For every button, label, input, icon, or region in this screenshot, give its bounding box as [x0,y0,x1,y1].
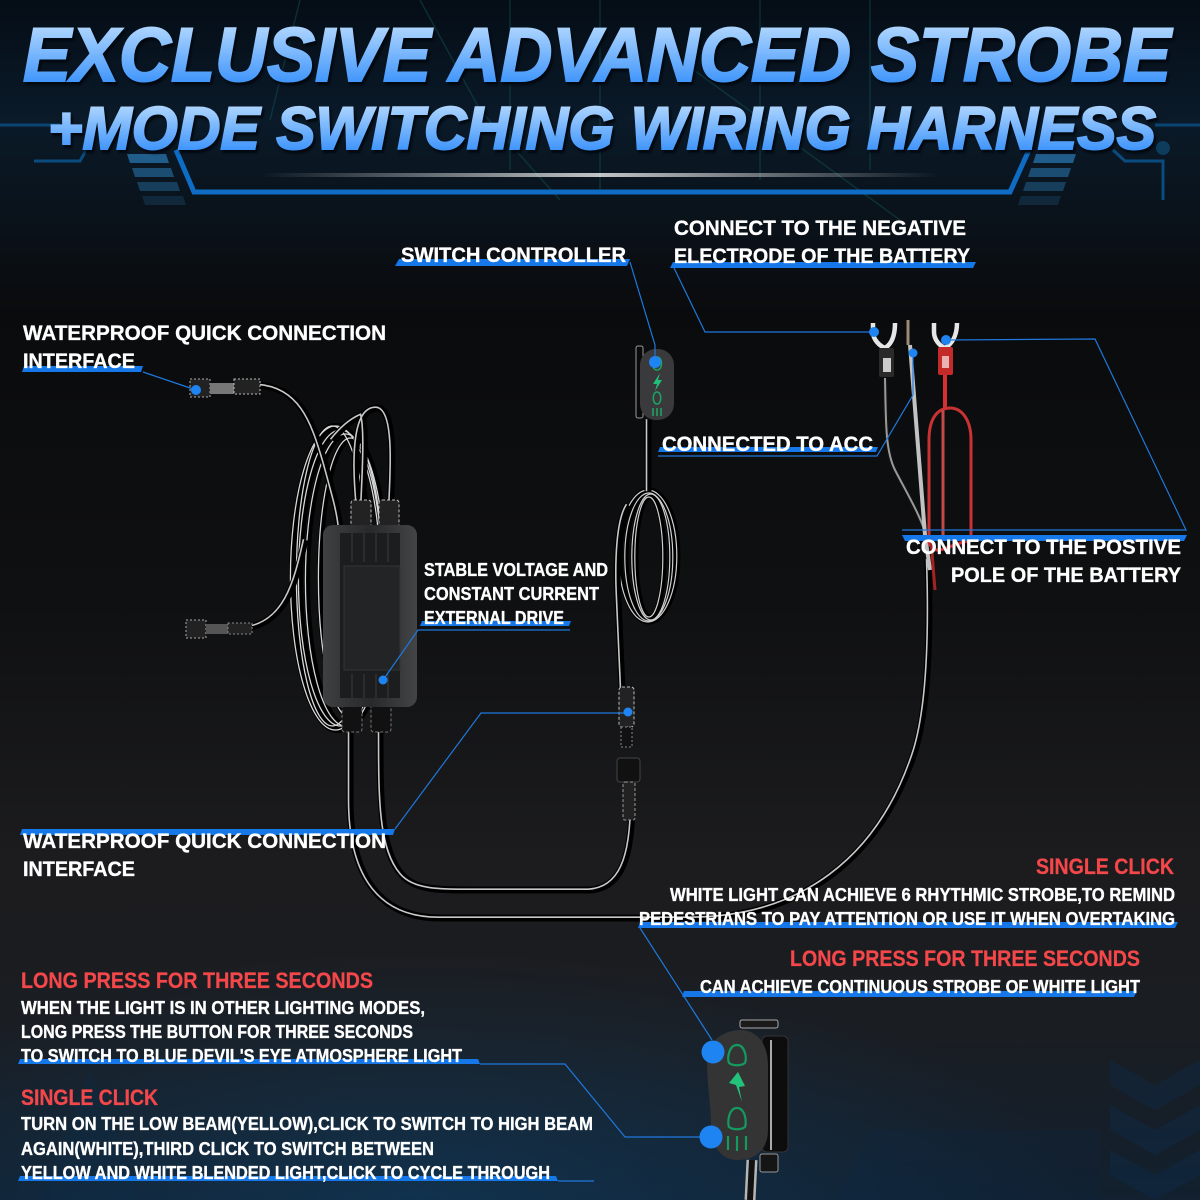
callout: switch controller: SWITCH CONTROLLER [401,244,626,267]
callout: stable voltage driver: CONSTANT CURRENT [424,584,599,604]
callout: positive pole: CONNECT TO THE POSTIVE [906,536,1181,559]
icon: upper left waterproof connector [190,379,260,397]
callout: single click left: TURN ON THE LOW BEAM(YELLOW),CLICK TO SWITCH TO HIGH BEAM [21,1114,593,1134]
icon: low beam and high beam green symbols [728,1045,746,1151]
callout: stable voltage driver: EXTERNAL DRIVE [424,608,564,628]
battery wires [885,320,972,590]
callout: waterproof interface lower: WATERPROOF QUICK CONNECTION [23,830,386,853]
callout: single click left: AGAIN(WHITE),THIRD CLICK TO SWITCH BETWEEN [21,1139,434,1159]
lower switch controller [707,1020,788,1200]
callout: waterproof interface upper: INTERFACE [23,350,135,373]
wiring harness product [186,320,972,918]
icon: strain reliefs on driver box [342,500,399,732]
callout: negative electrode: ELECTRODE OF THE BATTERY [674,245,970,268]
callout: single click right: SINGLE CLICK [1036,854,1174,879]
callout: single click left: YELLOW AND WHITE BLENDED LIGHT,CLICK TO CYCLE THROUGH [21,1163,550,1183]
title: +MODE SWITCHING WIRING HARNESS [48,95,1156,162]
callout: long press left: TO SWITCH TO BLUE DEVIL'S EYE ATMOSPHERE LIGHT [21,1046,462,1066]
title decorative frame [0,125,1200,205]
callout: connected to ACC [658,348,918,456]
callout: long press left: LONG PRESS FOR THREE SECONDS [21,968,373,993]
icon: positive spade terminal [934,323,957,375]
callout: waterproof interface upper: WATERPROOF QUICK CONNECTION [23,322,386,345]
callout: stable voltage driver: STABLE VOLTAGE AND [424,560,608,580]
callout: single click left: SINGLE CLICK [21,1085,158,1110]
callout: long press right: CAN ACHIEVE CONTINUOUS STROBE OF WHITE LIGHT [700,977,1140,997]
callout: long press right: LONG PRESS FOR THREE SECONDS [790,946,1140,971]
callout: single click right: WHITE LIGHT CAN ACHIEVE 6 RHYTHMIC STROBE,TO REMIND [670,885,1175,905]
inline waterproof connector [617,687,640,820]
callout: stable voltage driver [378,560,608,684]
callout: negative electrode: CONNECT TO THE NEGATIVE [674,217,966,240]
callout: long press left: WHEN THE LIGHT IS IN OTHER LIGHTING MODES, [21,998,425,1018]
callout: switch controller [395,244,661,368]
callout: long press right [682,946,1140,997]
callout: single click right [638,854,1178,929]
callout: negative electrode [670,217,976,337]
callout: positive pole: POLE OF THE BATTERY [951,564,1181,587]
callout: connected to ACC: CONNECTED TO ACC [662,433,873,456]
cable coils and leads [244,384,929,918]
icon: negative spade terminal [873,323,895,377]
icon: lower left waterproof connector [186,620,252,638]
callout: waterproof interface upper [22,322,386,395]
callout: lower dot and leader for lower switch [480,1064,722,1148]
callout: waterproof interface lower: INTERFACE [23,858,135,881]
driver box [323,525,417,707]
callout: long press left [18,968,480,1066]
callout: single click left [18,1085,594,1183]
callout: long press left: LONG PRESS THE BUTTON FOR THREE SECONDS [21,1022,413,1042]
title [23,13,1173,162]
top switch controller [636,346,674,420]
callout: waterproof interface lower [20,708,632,881]
callout: upper dot and leader for lower switch [640,928,724,1064]
title: EXCLUSIVE ADVANCED STROBE [23,13,1173,98]
callout: positive pole [902,335,1187,587]
